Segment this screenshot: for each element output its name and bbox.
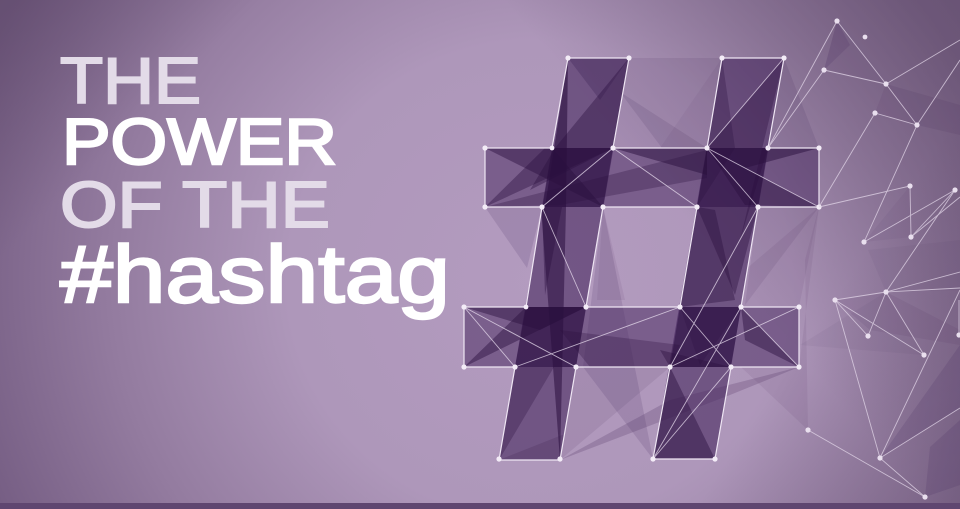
network shards: [800, 21, 960, 497]
hash symbol: [461, 55, 822, 462]
vertical bars: [499, 58, 784, 460]
horizontal bars: [464, 148, 819, 367]
bottom strip: [0, 503, 960, 509]
title: [60, 44, 450, 320]
crossings: [515, 148, 768, 367]
title line: OF THE: OF THE: [60, 168, 330, 241]
network lines: [768, 21, 960, 497]
network constellation: [768, 18, 960, 500]
hash outline: [464, 58, 819, 460]
translucent shards behind hash: [485, 58, 819, 460]
inner white lines: [464, 58, 819, 459]
hash nodes: [461, 55, 822, 462]
facets inside hash: [464, 58, 819, 460]
title line: THE: THE: [60, 44, 201, 117]
network nodes: [805, 18, 960, 500]
title line: #hashtag: #hashtag: [60, 230, 450, 320]
title line: POWER: POWER: [62, 105, 337, 178]
